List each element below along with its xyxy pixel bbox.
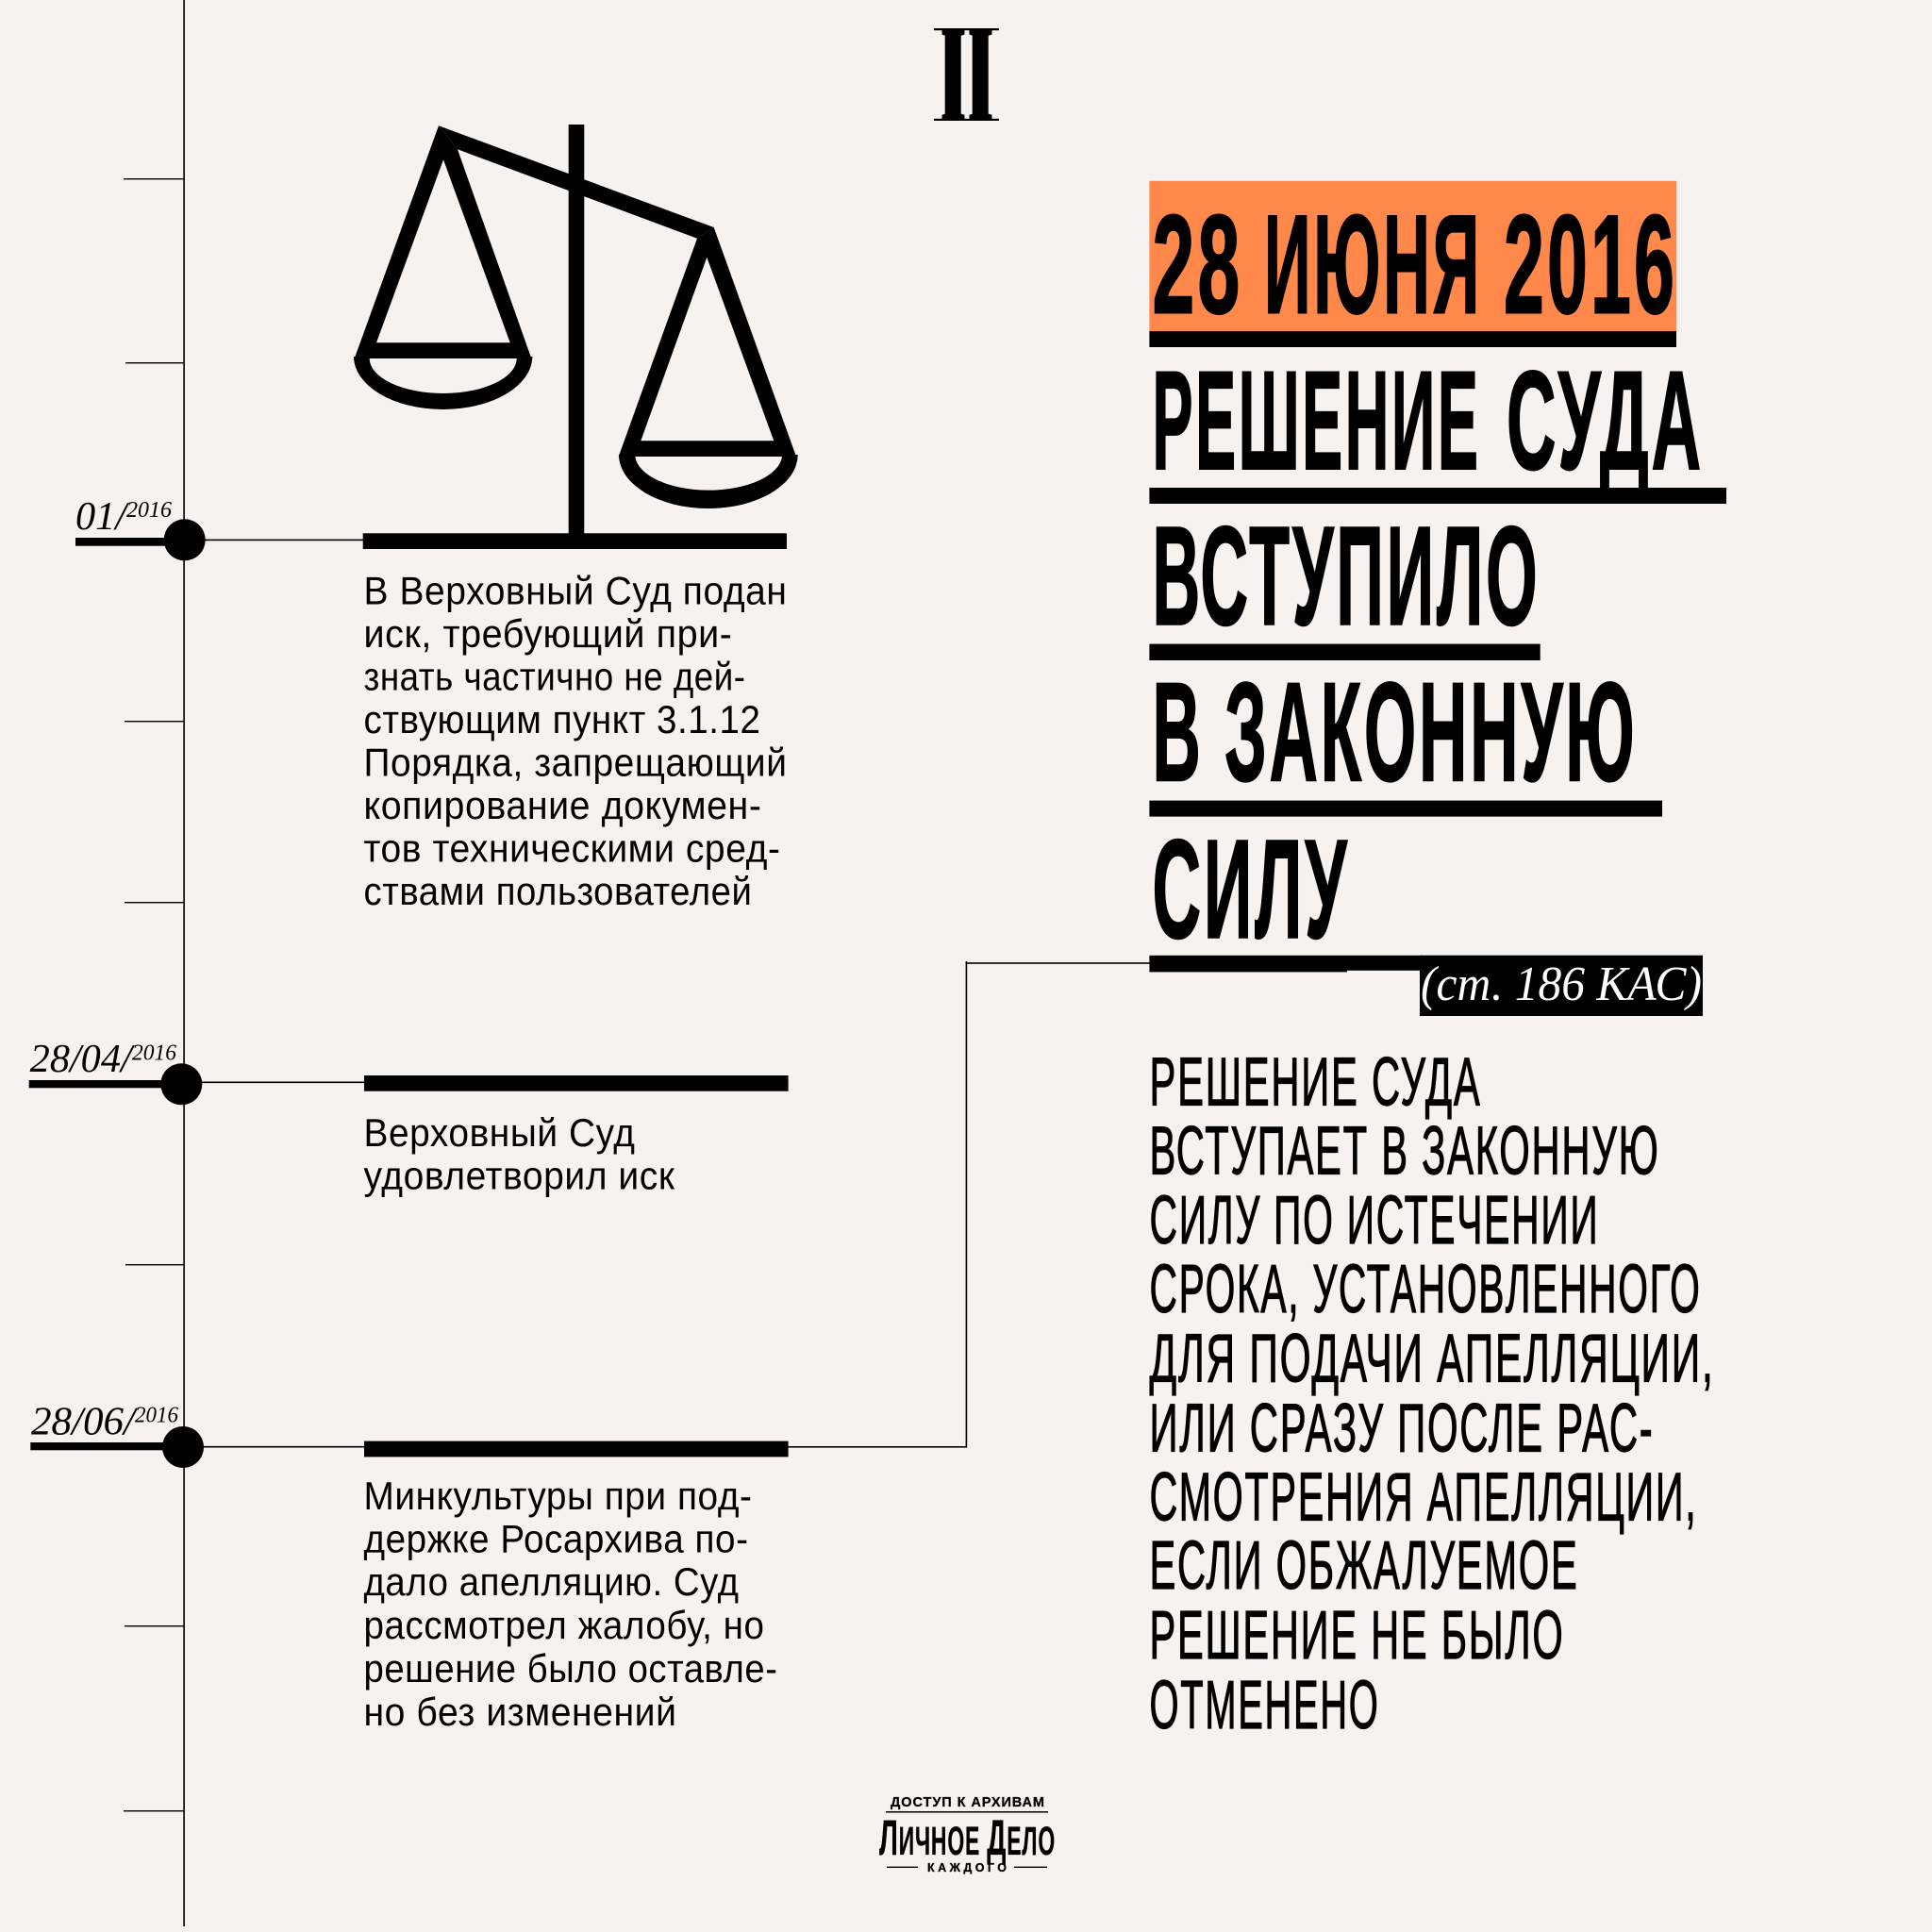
date highlight [1149, 181, 1676, 332]
body text: explanation: ОТМЕНЕНО [1149, 1668, 1379, 1743]
event 3: 28 June 2016 [30, 1401, 789, 1734]
logo: ЛИЧНОЕ ДЕЛО [879, 1810, 1056, 1866]
event text: ствами пользователей [364, 869, 753, 913]
heading lines [1153, 185, 1704, 968]
event text: копирование докумен- [364, 783, 762, 827]
heading lines: ИЮНЯ [1264, 185, 1482, 343]
article reference tag: (ст. 186 КАС) [1421, 958, 1702, 1011]
headline: ruling date and title [1149, 181, 1726, 1016]
connector from event 3 to headline [788, 961, 1151, 1448]
event text: В Верховный Суд подан [364, 568, 787, 612]
timeline axis with ticks [124, 0, 185, 1926]
body text: explanation: СИЛУ ПО ИСТЕЧЕНИИ [1149, 1183, 1600, 1258]
section numeral [934, 0, 999, 150]
heading lines: РЕШЕНИЕ [1153, 341, 1481, 499]
date label 28/06/2016: 28/06/ [31, 1401, 138, 1444]
date label 01/2016: 2016 [126, 498, 172, 523]
event text: держке Росархива по- [364, 1517, 749, 1560]
date marker [75, 519, 364, 560]
icon: scales of justice [354, 125, 798, 549]
body text: explanation: РЕШЕНИЕ СУДА [1149, 1045, 1481, 1121]
date label 28/04/2016 [30, 1038, 176, 1081]
event text [364, 1474, 777, 1734]
event text: Верховный Суд [364, 1110, 636, 1155]
event text: иск, требующий при- [364, 611, 732, 656]
date label 28/04/2016: 2016 [132, 1041, 176, 1065]
date label 01/2016 [75, 495, 172, 539]
section numeral: II [940, 0, 994, 150]
event text [364, 568, 787, 913]
headline: ruling date and title: СУДА [1507, 341, 1704, 499]
date label 28/06/2016 [31, 1401, 178, 1444]
event text: рассмотрел жалобу, но [364, 1603, 764, 1647]
heading lines: 2016 [1504, 185, 1677, 343]
event text: удовлетворил иск [364, 1153, 675, 1198]
logo [879, 1795, 1056, 1874]
date marker [29, 1063, 789, 1105]
heading lines: СИЛУ [1153, 810, 1349, 968]
date label 28/06/2016: 2016 [135, 1404, 178, 1428]
date label 28/04/2016: 28/04/ [30, 1038, 135, 1081]
event text: решение было оставле- [364, 1646, 777, 1690]
logo: КАЖДОГО [927, 1861, 1007, 1874]
body text: explanation: РЕШЕНИЕ НЕ БЫЛО [1149, 1598, 1564, 1674]
event text: но без изменений [364, 1690, 677, 1734]
event text: дало апелляцию. Суд [364, 1559, 740, 1604]
body text: explanation: ЕСЛИ ОБЖАЛУЕМОЕ [1149, 1528, 1579, 1604]
logo: ДОСТУП К АРХИВАМ [891, 1795, 1044, 1810]
date label 01/2016: 01/ [75, 495, 129, 539]
body text: explanation [1149, 1045, 1715, 1743]
event text: Минкультуры при под- [364, 1474, 753, 1518]
heading lines: 28 [1153, 185, 1243, 343]
date marker [30, 1426, 789, 1468]
event text: ствующим пункт 3.1.12 [364, 697, 760, 741]
heading rules [1149, 331, 1726, 972]
event 1: January 2016 [75, 495, 787, 913]
event text: Порядка, запрещающий [364, 740, 787, 785]
event text [364, 1110, 675, 1198]
event text: знать частично не дей- [364, 655, 745, 698]
event text: тов техническими сред- [364, 826, 781, 870]
event 2: 28 April 2016 [29, 1038, 789, 1198]
